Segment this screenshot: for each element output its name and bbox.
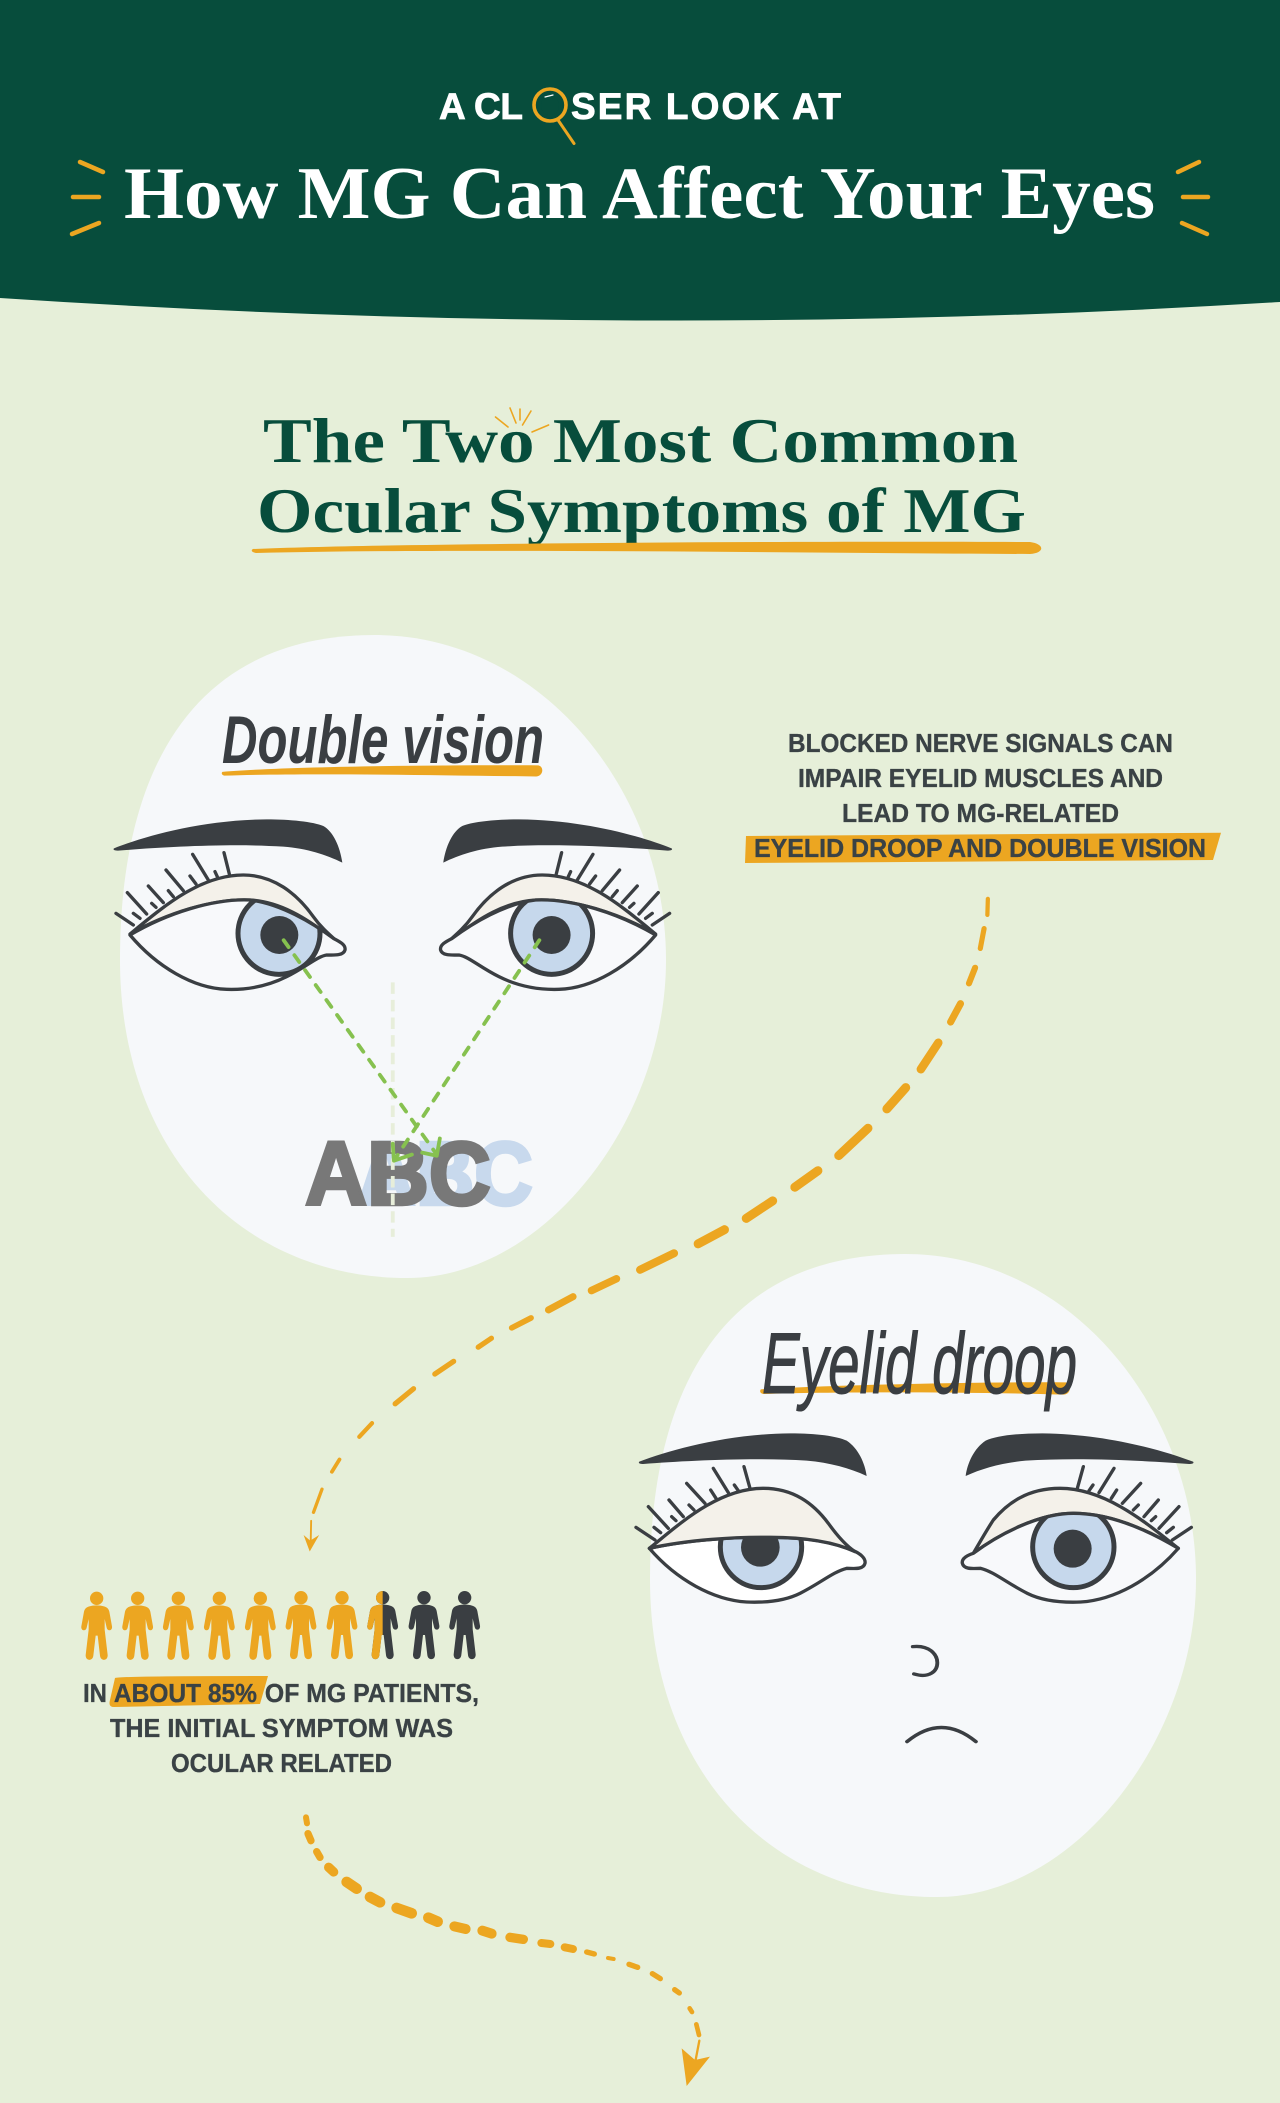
blurred abc letters: ABC [357,1124,533,1225]
right brow [443,819,672,863]
title sparks [72,162,1208,234]
title: How MG Can Affect Your Eyes [124,153,1155,235]
frowning mouth [907,1727,976,1742]
highlight swash [110,1676,268,1707]
drooping eyelid [649,1488,855,1552]
left eye outline [130,900,345,989]
callout: blocked nerve signals: EYELID DROOP AND DOUBLE VISION [754,835,1206,863]
highlight swash [745,833,1221,863]
left eyelid [130,875,337,942]
subheading burst [496,408,549,432]
sharp abc letters: ABC [305,1124,491,1225]
heading: eyelid droop: Eyelid droop [762,1316,1077,1412]
statistic text: ABOUT 85% [108,1678,257,1708]
face features: double vision left eye [114,819,345,989]
left eye white [130,900,345,989]
left iris [238,892,320,974]
left brow [639,1433,867,1476]
sight lines [284,940,539,1161]
left lashes [636,1467,750,1540]
iris under lid [718,1538,804,1590]
arrow: callout to statistic [304,899,988,1552]
left lashes [116,853,229,925]
open eye [962,1467,1191,1602]
callout: blocked nerve signals: BLOCKED NERVE SIGNALS CAN [788,730,1173,758]
eye outline [649,1537,865,1602]
subheading [257,405,1026,546]
panel: double vision face [120,635,666,1278]
subheading underline [252,542,1041,554]
right iris [511,892,593,974]
subheading: Ocular Symptoms of MG [257,475,1026,546]
panel: eyelid droop face [650,1254,1196,1897]
right eye white [440,900,656,989]
kicker: a closer look at [439,86,841,144]
callout: blocked nerve signals: LEAD TO MG-RELATED [842,800,1119,828]
kicker: a closer look at: SER LOOK AT [571,86,841,127]
callout: blocked nerve signals: IMPAIR EYELID MUSCLES AND [798,765,1163,793]
statistic text: THE INITIAL SYMPTOM WAS [110,1713,453,1743]
face features: double vision right eye [440,819,672,989]
double vision letters and sight lines [284,940,539,1237]
kicker: a closer look at: A CL [439,86,523,127]
header band [0,0,1280,321]
statistic text: IN [83,1678,107,1708]
double vision underline [222,765,542,776]
right eyelid [448,875,656,942]
subheading: The Two Most Common [263,405,1018,476]
pictogram: 85 percent of people [81,1591,480,1660]
nose [913,1646,937,1675]
nose and mouth: eyelid droop [907,1646,976,1742]
statistic text: OCULAR RELATED [171,1748,392,1778]
right eye outline [440,900,656,989]
statistic text [83,1676,479,1778]
centre guide line [388,982,398,1237]
eyelid droop underline [760,1382,1070,1395]
eye white [649,1537,865,1602]
face features: open right eye [962,1433,1193,1602]
heading: double vision: Double vision [222,702,544,778]
left brow [114,819,342,863]
right brow [966,1433,1193,1476]
kicker: a closer look at: O [536,87,564,125]
right lashes [556,853,670,925]
icon: magnifying glass [534,89,574,144]
statistic text: OF MG PATIENTS, [258,1678,479,1708]
face features: drooping left eye [636,1433,867,1602]
arrow: continues downward [306,1817,710,2086]
callout: blocked nerve signals [745,730,1221,863]
